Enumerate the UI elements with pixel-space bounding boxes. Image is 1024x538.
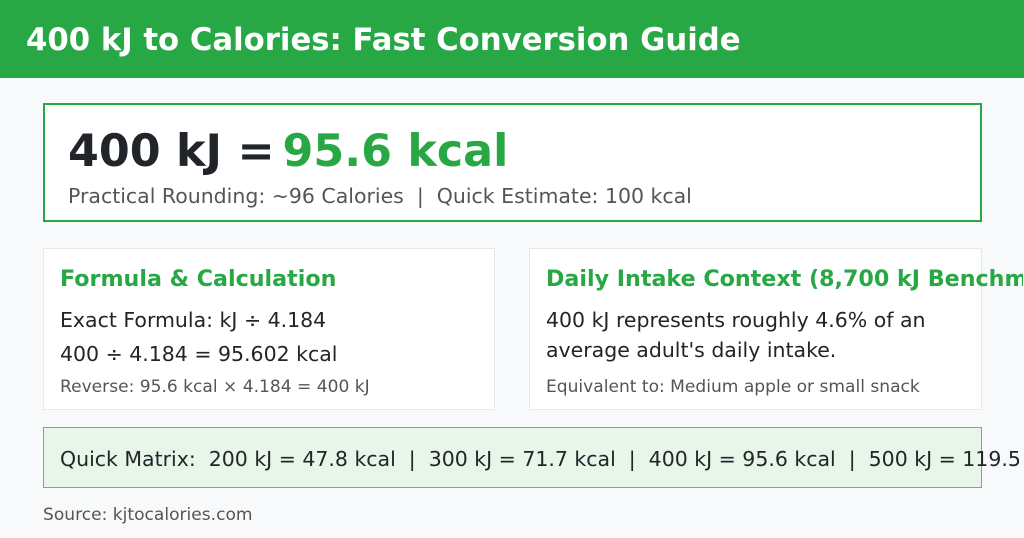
result: 400 kJ equals: 400 kJ = [68, 126, 275, 177]
panel: daily intake context [529, 248, 982, 410]
result: 95.6 kcal: 95.6 kcal [282, 126, 508, 177]
panel: quick matrix [43, 427, 982, 488]
rounding note: Practical Rounding: ~96 Calories | Quick Estimate: 100 kcal [68, 184, 692, 208]
exact formula: Exact Formula: kJ ÷ 4.184 [60, 308, 326, 332]
formula heading: Formula & Calculation [60, 266, 336, 292]
title: 400 kJ to Calories: Fast Conversion Guide [26, 22, 741, 58]
source note: Source: kjtocalories.com [43, 505, 253, 525]
panel: formula and calculation [43, 248, 495, 410]
header banner [0, 0, 1024, 78]
reverse calculation: Reverse: 95.6 kcal × 4.184 = 400 kJ [60, 376, 370, 396]
panel: main result [43, 103, 982, 222]
daily intake description: 400 kJ represents roughly 4.6% of an average adult's daily intake. [546, 308, 926, 362]
food equivalent: Equivalent to: Medium apple or small snack [546, 376, 920, 396]
worked calculation: 400 ÷ 4.184 = 95.602 kcal [60, 342, 337, 366]
